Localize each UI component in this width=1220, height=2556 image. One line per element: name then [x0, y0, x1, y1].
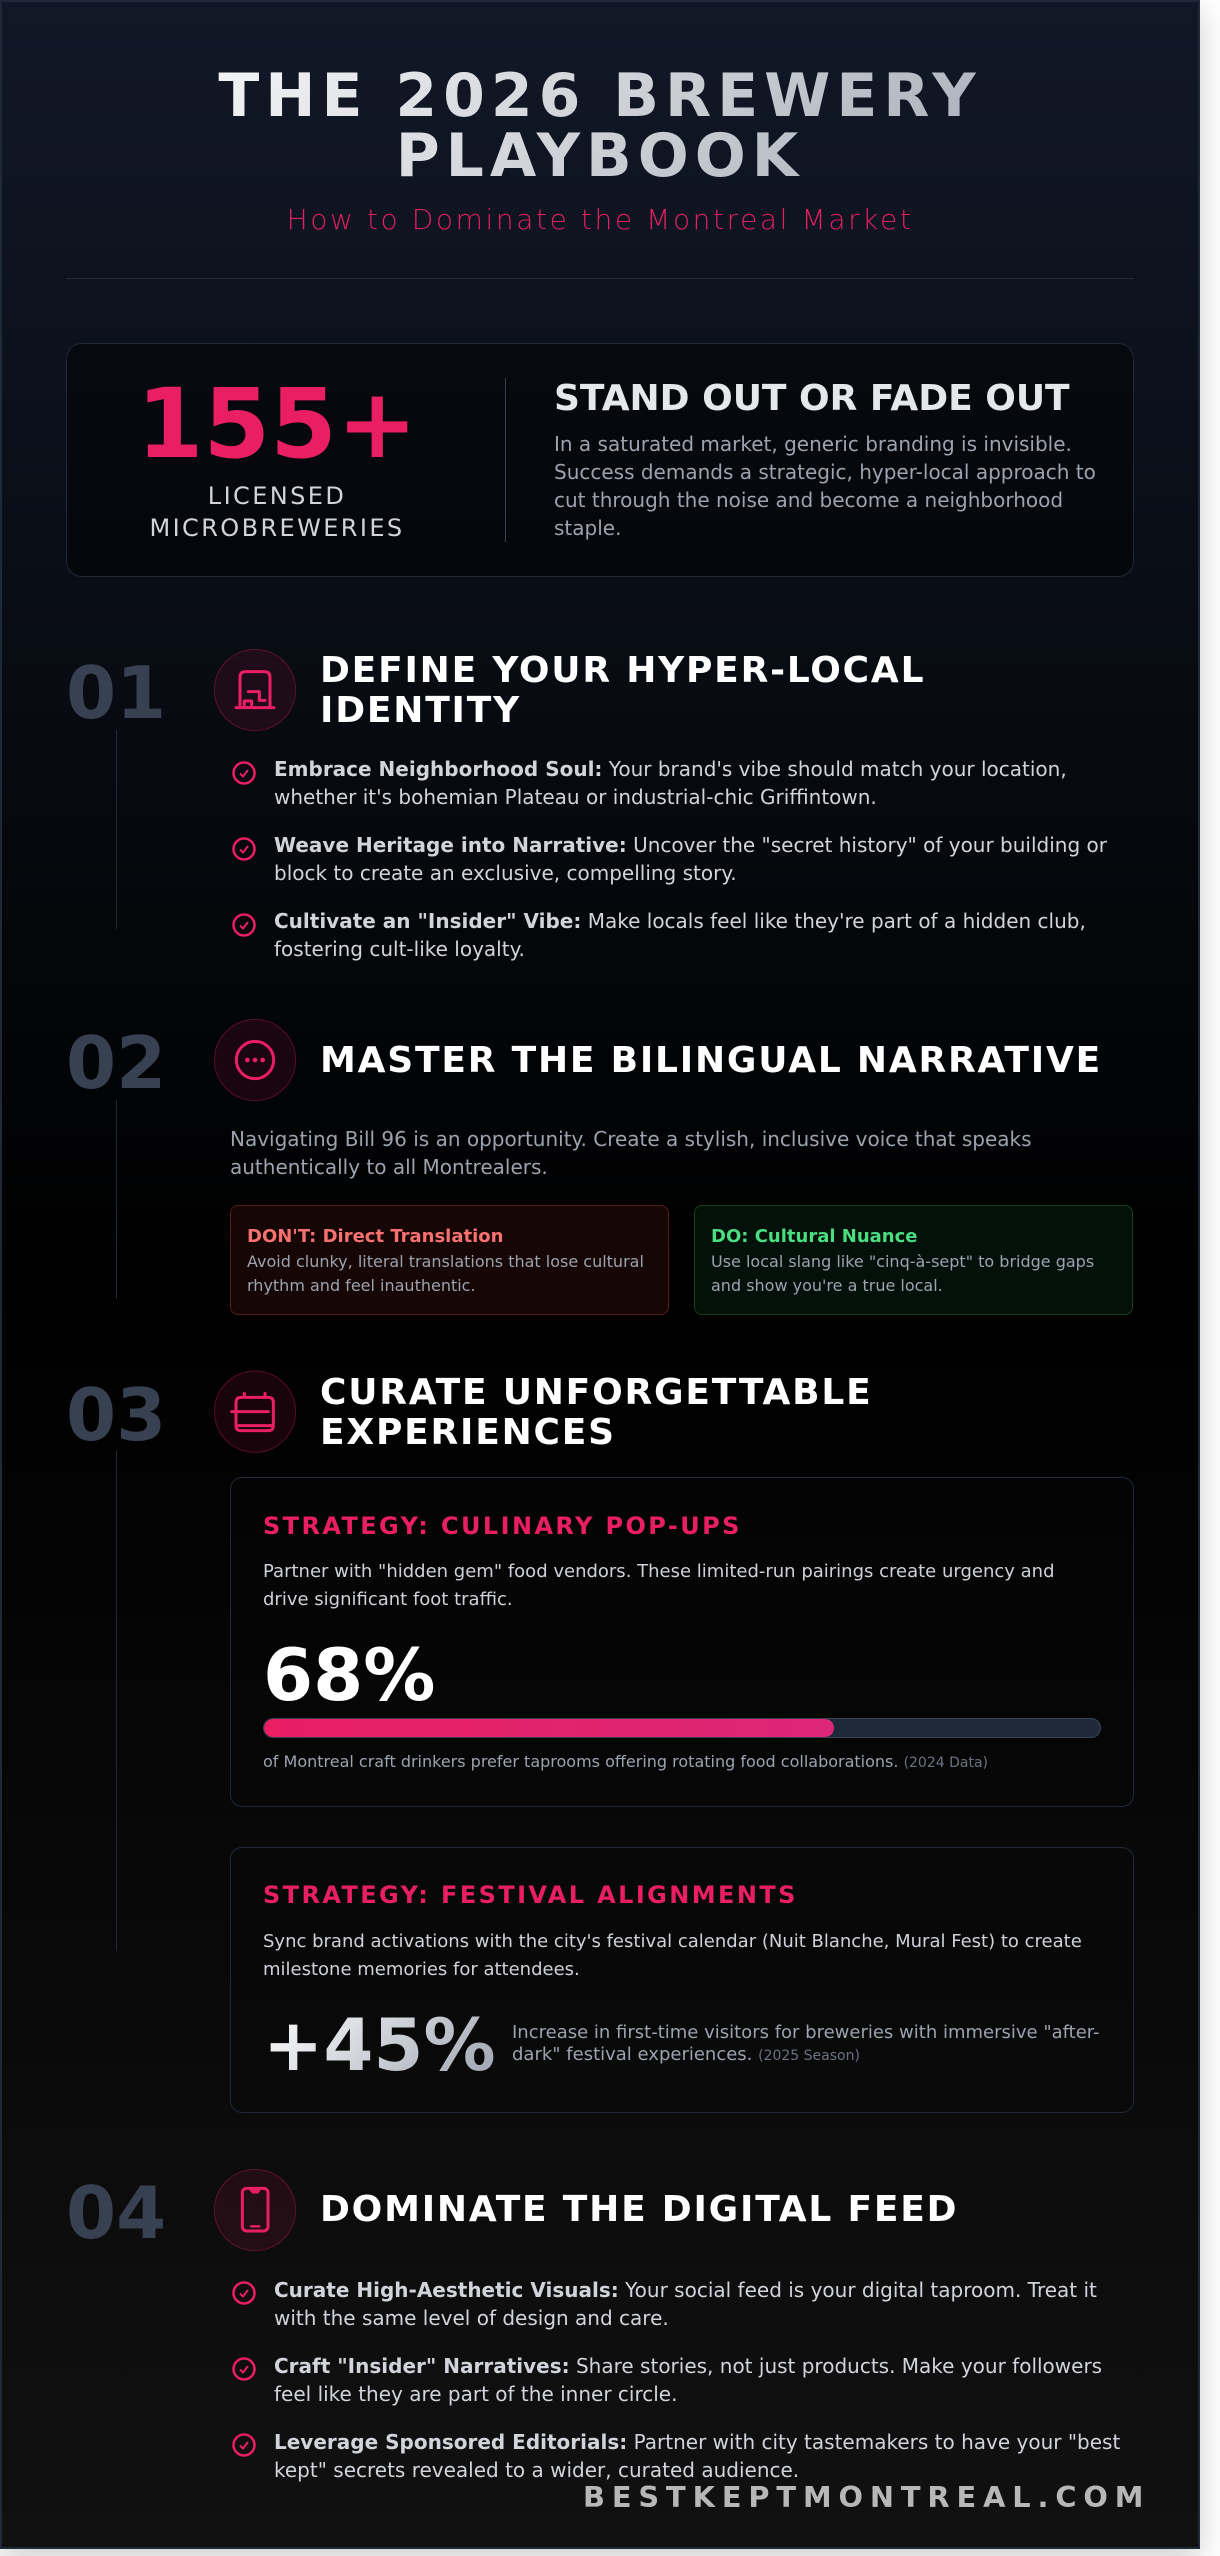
- intro text: Success demands a strategic, hyper-local approach to: [554, 460, 1096, 484]
- section 03 heading: CURATE UNFORGETTABLE: [320, 1372, 873, 1413]
- bullet: fostering cult-like loyalty.: [274, 937, 525, 961]
- section 03 heading: [320, 1372, 873, 1453]
- bullet: Curate High-Aesthetic Visuals: Your social feed is your digital taproom. Treat it: [274, 2278, 1097, 2302]
- check icon: [232, 2357, 256, 2381]
- festival text: [263, 1931, 1082, 1980]
- don't text: [247, 1252, 644, 1295]
- footer website: BESTKEPTMONTREAL.COM: [583, 2480, 1150, 2514]
- big stat: 155+: [137, 368, 417, 480]
- culinary note: of Montreal craft drinkers prefer taprooms offering rotating food collaborations. (2024 Data): [263, 1752, 988, 1771]
- header divider: [66, 278, 1134, 279]
- check icon: [232, 837, 256, 861]
- bullet: [274, 2354, 1102, 2406]
- bullet: [274, 833, 1107, 885]
- +45% stat: +45%: [263, 2003, 496, 2087]
- section 01 number: 01: [66, 651, 166, 735]
- bullet: feel like they are part of the inner circle.: [274, 2382, 677, 2406]
- bullet: [274, 909, 1086, 961]
- bullet: with the same level of design and care.: [274, 2306, 669, 2330]
- check icon: [232, 761, 256, 785]
- section 04 number: 04: [66, 2171, 166, 2255]
- don't heading: DON'T: Direct Translation: [247, 1226, 503, 1247]
- festival note: dark" festival experiences. (2025 Season): [512, 2044, 860, 2065]
- don't text: Avoid clunky, literal translations that lose cultural: [247, 1252, 644, 1271]
- culinary text: [263, 1561, 1054, 1610]
- festival text: Sync brand activations with the city's festival calendar (Nuit Blanche, Mural Fest) to create: [263, 1931, 1082, 1952]
- bullet: Cultivate an "Insider" Vibe: Make locals feel like they're part of a hidden club,: [274, 909, 1086, 933]
- bullet: [274, 2278, 1097, 2330]
- check icon: [232, 913, 256, 937]
- stat label: [149, 482, 405, 542]
- panel: festival card: [230, 1847, 1134, 2113]
- title: [66, 66, 1134, 186]
- intro text: [554, 432, 1096, 540]
- festival text: milestone memories for attendees.: [263, 1959, 580, 1980]
- section 02 number: 02: [66, 1021, 166, 1105]
- section 02 heading: MASTER THE BILINGUAL NARRATIVE: [320, 1040, 1102, 1081]
- section 01 line: [116, 730, 117, 929]
- section 03 number: 03: [66, 1373, 166, 1457]
- subtitle: How to Dominate the Montreal Market: [287, 203, 913, 236]
- check icon: [232, 2433, 256, 2457]
- title: THE 2026 BREWERY: [218, 61, 982, 131]
- section 02 line: [116, 1100, 117, 1299]
- section 02 intro: [230, 1127, 1032, 1179]
- section 01 heading: DEFINE YOUR HYPER-LOCAL: [320, 650, 925, 691]
- do heading: DO: Cultural Nuance: [711, 1226, 918, 1247]
- intro text: cut through the noise and become a neighborhood: [554, 488, 1063, 512]
- section 02 intro: Navigating Bill 96 is an opportunity. Create a stylish, inclusive voice that speaks: [230, 1127, 1032, 1151]
- progress bar: [263, 1718, 1101, 1738]
- do text: Use local slang like "cinq-à-sept" to bridge gaps: [711, 1252, 1094, 1271]
- stat label: MICROBREWERIES: [149, 514, 405, 542]
- intro text: staple.: [554, 516, 621, 540]
- bullet: Embrace Neighborhood Soul: Your brand's vibe should match your location,: [274, 757, 1067, 781]
- festival note: [512, 2022, 1100, 2065]
- section 04 heading: DOMINATE THE DIGITAL FEED: [320, 2189, 958, 2230]
- icon: chat: [214, 1018, 296, 1102]
- stat divider: [505, 378, 506, 542]
- bullet: kept" secrets revealed to a wider, curated audience.: [274, 2458, 799, 2482]
- culinary text: Partner with "hidden gem" food vendors. These limited-run pairings create urgency and: [263, 1561, 1054, 1582]
- festival note: Increase in first-time visitors for breweries with immersive "after-: [512, 2022, 1100, 2043]
- bullet: Leverage Sponsored Editorials: Partner with city tastemakers to have your "best: [274, 2430, 1120, 2454]
- culinary heading: STRATEGY: CULINARY POP-UPS: [263, 1512, 742, 1540]
- culinary text: drive significant foot traffic.: [263, 1589, 513, 1610]
- title: PLAYBOOK: [396, 121, 804, 191]
- section 02 intro: authentically to all Montrealers.: [230, 1155, 548, 1179]
- icon: calendar: [214, 1370, 296, 1453]
- panel: don't: [230, 1205, 669, 1315]
- bullet: block to create an exclusive, compelling story.: [274, 861, 737, 885]
- panel: culinary card: [230, 1477, 1134, 1807]
- intro heading: STAND OUT OR FADE OUT: [554, 378, 1070, 419]
- bullet: [274, 757, 1067, 809]
- 68% stat: 68%: [263, 1633, 435, 1717]
- stat label: LICENSED: [208, 482, 346, 510]
- check icon: [232, 2281, 256, 2305]
- bullet: whether it's bohemian Plateau or industrial-chic Griffintown.: [274, 785, 877, 809]
- bullet: [274, 2430, 1120, 2482]
- don't text: rhythm and feel inauthentic.: [247, 1276, 476, 1295]
- icon: phone: [214, 2168, 296, 2252]
- do text: and show you're a true local.: [711, 1276, 943, 1295]
- icon: building: [214, 648, 296, 732]
- do text: [711, 1252, 1094, 1295]
- section 01 heading: IDENTITY: [320, 690, 521, 731]
- section 03 line: [116, 1451, 117, 1951]
- panel: stat intro: [66, 343, 1134, 577]
- bullet: Craft "Insider" Narratives: Share stories, not just products. Make your followers: [274, 2354, 1102, 2378]
- intro text: In a saturated market, generic branding is invisible.: [554, 432, 1072, 456]
- section 03 heading: EXPERIENCES: [320, 1412, 616, 1453]
- panel: do: [694, 1205, 1133, 1315]
- bullet: Weave Heritage into Narrative: Uncover the "secret history" of your building or: [274, 833, 1107, 857]
- festival heading: STRATEGY: FESTIVAL ALIGNMENTS: [263, 1881, 798, 1909]
- section 01 heading: [320, 650, 925, 731]
